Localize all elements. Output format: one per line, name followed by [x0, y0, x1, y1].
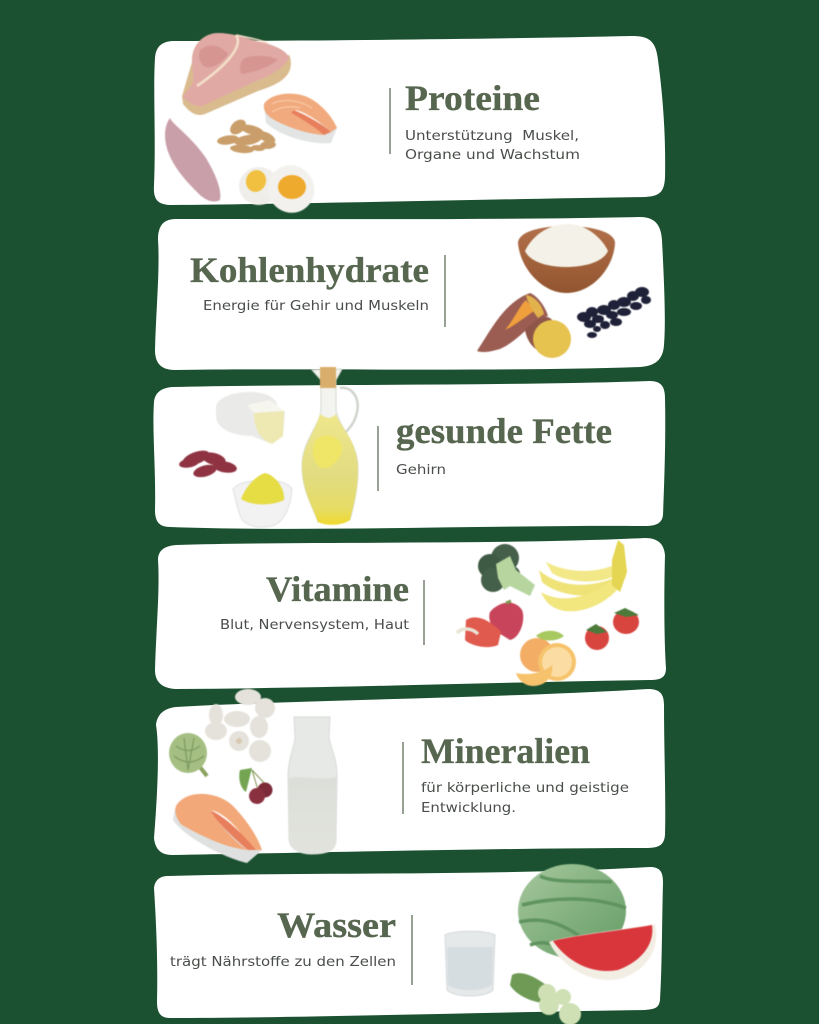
panel shape: gesunde Fette: [153, 381, 665, 529]
panel shape: Vitamine: [155, 538, 666, 689]
panel shape: Proteine: [154, 36, 665, 205]
panel shape: Wasser: [154, 867, 663, 1018]
panel: Proteine: [154, 33, 665, 221]
panel: Vitamine: [155, 538, 666, 689]
icon: bananas: [539, 540, 627, 611]
icon: mushrooms: [205, 689, 275, 762]
icon: meat fillet: [165, 118, 220, 202]
divider and text: Proteine: Organe und Wachstum: [405, 147, 580, 163]
divider and text: Mineralien: [403, 742, 629, 816]
icon: sweet potato: [477, 293, 571, 358]
icon: almonds: [216, 117, 277, 154]
panel shape: Mineralien: [154, 689, 665, 855]
divider and text: Mineralien: für körperliche und geistige: [421, 780, 629, 796]
heading: Vitamine: Vitamine: [266, 569, 409, 609]
heading: Kohlenhydrate: Kohlenhydrate: [190, 250, 429, 290]
icon: steak: [182, 33, 291, 115]
icon: strawberries: [585, 608, 639, 650]
panel: Mineralien: [154, 689, 665, 863]
icon: water glass: [445, 931, 495, 996]
divider and text: gesunde Fette: [378, 426, 446, 491]
icon: glass milk bottle: [288, 717, 337, 854]
icon: cucumber: [510, 973, 581, 1024]
icon: rice bowl: [518, 224, 615, 293]
panel: Wasser: [154, 864, 663, 1024]
icon: butter in bowl: [233, 473, 292, 527]
icon: olive oil bottle: [302, 367, 358, 525]
divider and text: gesunde Fette: Gehirn: [396, 462, 446, 478]
icon: black beans: [577, 287, 651, 338]
icon: salmon steak: [173, 794, 262, 863]
icon: broccoli: [478, 544, 535, 596]
icon: cheese wheel: [216, 392, 285, 444]
heading: Proteine: Proteine: [405, 78, 540, 118]
icon: kidney beans: [178, 448, 238, 479]
panel: Kohlenhydrate: [155, 217, 665, 370]
divider and text: Kohlenhydrate: Energie für Gehir und Muskeln: [203, 298, 429, 314]
heading: Mineralien: Mineralien: [421, 731, 590, 771]
icon: watermelon slice: [549, 924, 656, 980]
icon: oranges: [516, 631, 576, 686]
icon: watermelon: [518, 864, 626, 958]
divider and text: Vitamine: Blut, Nervensystem, Haut: [220, 617, 409, 633]
icon: artichoke: [169, 733, 207, 776]
divider and text: Wasser: trägt Nährstoffe zu den Zellen: [170, 954, 396, 970]
divider and text: Proteine: [390, 88, 580, 163]
divider and text: Proteine: Unterstützung Muskel,: [405, 128, 579, 144]
icon: salmon steak: [264, 94, 337, 143]
heading: Wasser: Wasser: [277, 905, 396, 945]
icon: cherries: [239, 768, 272, 804]
panel: gesunde Fette: [153, 367, 665, 529]
icon: bell pepper: [457, 601, 523, 647]
icon: boiled eggs: [239, 157, 323, 221]
heading: gesunde Fette: gesunde Fette: [396, 411, 612, 451]
panel shape: Kohlenhydrate: [155, 217, 665, 370]
divider and text: Mineralien: Entwicklung.: [421, 800, 516, 816]
